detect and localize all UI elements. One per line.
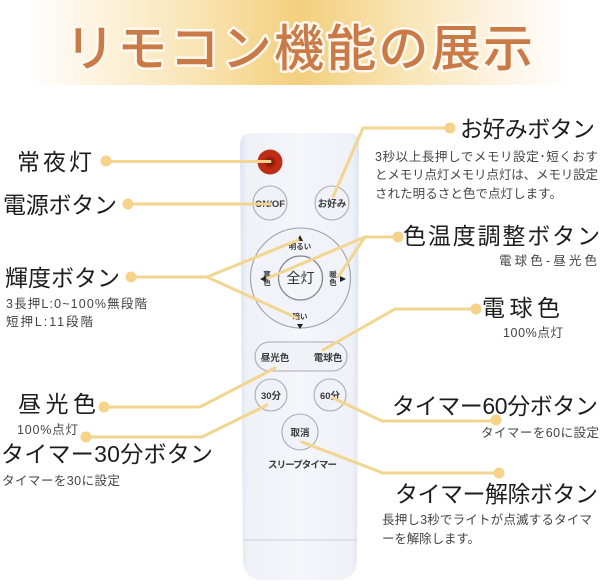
remote bottom seam xyxy=(243,539,357,541)
30 minute button: 30分 xyxy=(261,390,282,402)
label: brightness button: 短押L:11段階 xyxy=(6,314,93,329)
label: 30 minute timer xyxy=(1,441,213,488)
direction ring: 寒 xyxy=(263,269,271,279)
label: color temperature button: 電球色-昼光色 xyxy=(499,253,597,268)
label: color temperature button: 色温度調整ボタン xyxy=(403,223,600,249)
label: brightness button: 輝度ボタン xyxy=(5,265,120,291)
remote control xyxy=(240,133,359,580)
color mode pill button: 昼光色 xyxy=(261,352,290,364)
leader: warm color xyxy=(323,304,482,350)
60 minute button xyxy=(314,379,346,411)
direction ring: 暖 xyxy=(329,269,337,279)
label: brightness button xyxy=(5,265,147,329)
color mode pill button: 電球色 xyxy=(314,352,343,364)
leader: brightness xyxy=(126,240,298,318)
color mode pill button xyxy=(255,342,347,371)
label: warm color xyxy=(482,295,563,340)
label: 60 minute timer xyxy=(392,393,599,440)
label: favorite button: 3秒以上長押しでメモリ設定･短くおす xyxy=(375,150,598,164)
label: timer cancel button xyxy=(382,481,598,546)
favorite button: お好み xyxy=(318,198,347,210)
label: favorite button xyxy=(375,116,598,201)
sleep timer label: スリープタイマー xyxy=(268,459,337,471)
label: color temperature button xyxy=(403,223,600,268)
60 minute button: 60分 xyxy=(320,390,341,402)
remote body xyxy=(240,133,359,580)
cancel button: 取消 xyxy=(290,427,310,439)
label: timer cancel button: タイマー解除ボタン xyxy=(395,481,598,507)
ON/OFF button xyxy=(253,186,287,220)
label: 60 minute timer: タイマーを60に設定 xyxy=(481,426,599,440)
label: brightness button: 3長押L:0~100%無段階 xyxy=(6,296,147,311)
favorite button xyxy=(315,186,349,220)
direction ring: 明るい xyxy=(289,242,312,251)
leader: color temperature xyxy=(268,232,404,278)
leader: daylight xyxy=(98,368,275,412)
label: 30 minute timer: タイマー30分ボタン xyxy=(1,441,213,467)
label: power button: 電源ボタン xyxy=(3,192,117,218)
leader: timer cancel xyxy=(302,442,504,478)
label: warm color: 電球色 xyxy=(482,295,560,321)
label: 30 minute timer: タイマーを30に設定 xyxy=(2,474,120,488)
leader: 60 minutes xyxy=(333,398,502,426)
label: timer cancel button: ーを解除します。 xyxy=(382,532,480,546)
leader: power xyxy=(122,198,270,210)
label: favorite button: とメモリ点灯メモリ点灯は、メモリ設定 xyxy=(375,168,598,182)
leader: favorite xyxy=(333,122,456,197)
label: daylight xyxy=(17,391,96,437)
icon: red night light xyxy=(258,150,282,174)
label: daylight: 100%点灯 xyxy=(17,423,78,437)
label: timer cancel button: 長押し3秒でライトが点滅するタイマ xyxy=(382,512,592,527)
direction ring: 暗い xyxy=(292,311,308,321)
leader: night light xyxy=(100,156,270,166)
ON/OFF button: ON/OF xyxy=(255,199,285,210)
direction ring xyxy=(250,228,350,329)
label: favorite button: お好みボタン xyxy=(460,116,595,142)
title banner xyxy=(30,0,570,85)
label: favorite button: された明るさと色で点灯します。 xyxy=(375,187,562,201)
direction ring: 全灯 xyxy=(286,270,314,286)
direction ring: 色 xyxy=(263,277,271,287)
30 minute button xyxy=(255,379,287,411)
leader: 30 minutes xyxy=(80,405,267,442)
cancel button xyxy=(282,414,318,450)
label: 60 minute timer: タイマー60分ボタン xyxy=(392,393,598,419)
direction ring: 色 xyxy=(329,277,337,287)
label: night light: 常夜灯 xyxy=(17,149,92,175)
label: daylight: 昼光色 xyxy=(18,391,96,417)
label: warm color: 100%点灯 xyxy=(503,326,563,340)
title: リモコン機能の展示 xyxy=(65,21,533,77)
